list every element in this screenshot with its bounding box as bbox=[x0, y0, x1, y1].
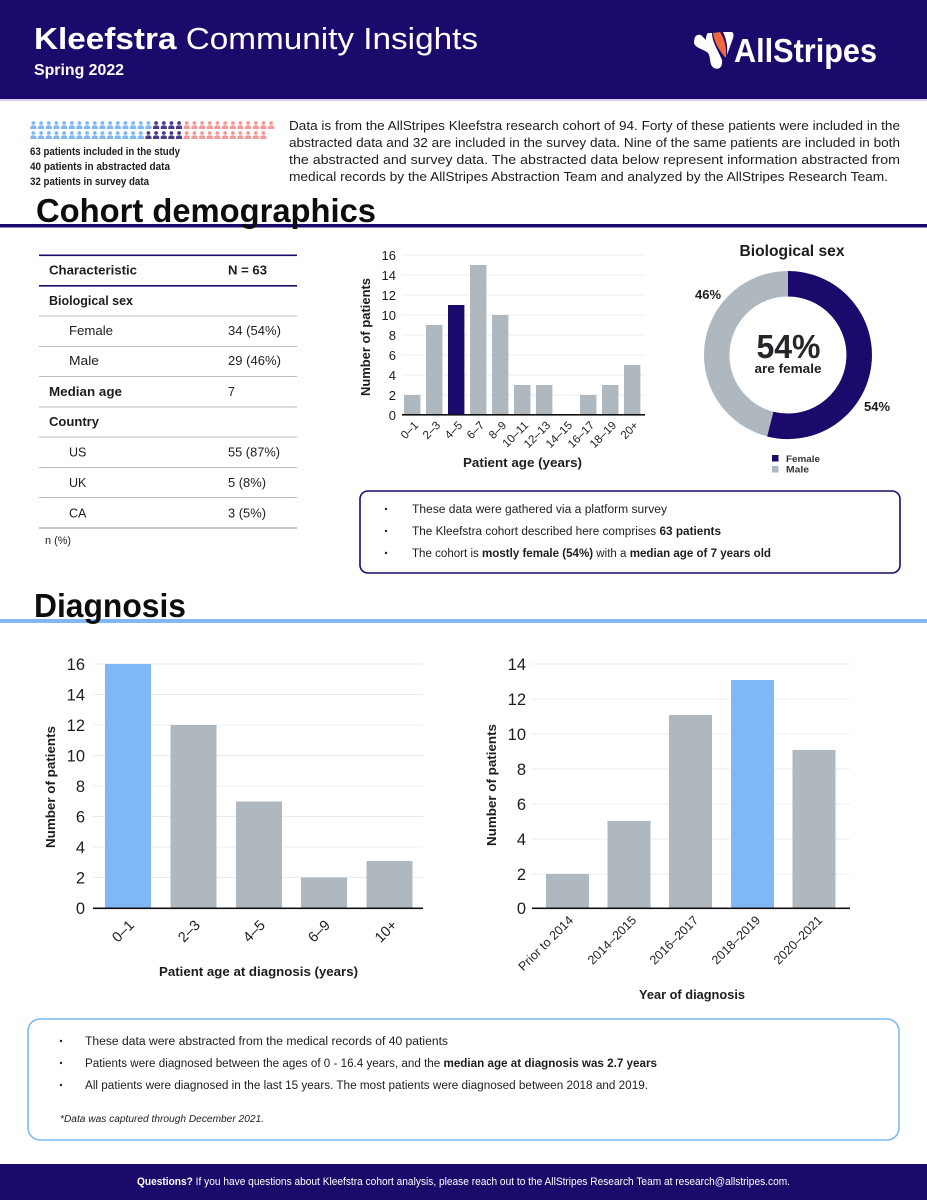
bar chart: year of diagnosis: 12 bbox=[508, 691, 526, 709]
table: cohort characteristics: CA bbox=[69, 506, 87, 520]
title: Kleefstra Community Insights bbox=[34, 21, 478, 56]
table: cohort characteristics: Country bbox=[49, 415, 99, 429]
table: cohort characteristics: Female bbox=[69, 324, 113, 338]
bar chart: year of diagnosis bbox=[485, 656, 850, 1002]
table: cohort characteristics: 34 (54%) bbox=[228, 324, 281, 338]
bar chart: year of diagnosis: 4 bbox=[517, 831, 526, 849]
pictogram legend text: 63 patients included in the study bbox=[30, 146, 181, 158]
bar chart: year of diagnosis: 6 bbox=[517, 796, 526, 814]
bar chart: age at diagnosis: Number of patients bbox=[44, 726, 58, 848]
bar chart: age at diagnosis bbox=[44, 656, 423, 979]
bar chart: age at diagnosis: 4–5 bbox=[240, 918, 269, 946]
callout: demographics summary: The cohort is mostly female (54%) with a median age of 7 years old bbox=[412, 548, 771, 560]
intro paragraph bbox=[289, 119, 900, 184]
section heading: diagnosis bbox=[0, 587, 927, 624]
bar chart: age at diagnosis: 2–3 bbox=[175, 918, 204, 946]
pictogram: patient icons bbox=[30, 121, 274, 139]
bar chart: patient age: 0 bbox=[389, 408, 396, 423]
bar chart: age at diagnosis: 6–9 bbox=[305, 918, 334, 946]
callout: diagnosis summary bbox=[28, 1019, 899, 1140]
bar chart: age at diagnosis: 8 bbox=[76, 778, 85, 796]
callout: demographics summary: These data were gathered via a platform survey bbox=[412, 504, 667, 516]
table: cohort characteristics: 3 (5%) bbox=[228, 506, 266, 520]
bar chart: year of diagnosis: 2014–2015 bbox=[585, 913, 639, 967]
bar chart: year of diagnosis: 2016–2017 bbox=[647, 913, 701, 967]
legend: Male bbox=[786, 464, 809, 476]
section heading: cohort demographics bbox=[0, 192, 927, 229]
bar chart: patient age: 12–13 bbox=[522, 420, 553, 451]
callout: diagnosis summary: Patients were diagnosed between the ages of 0 - 16.4 years, and the median age at diagnosis was 2.7 years bbox=[85, 1058, 657, 1070]
table: cohort characteristics: N = 63 bbox=[228, 264, 267, 278]
bar chart: patient age: 18–19 bbox=[588, 420, 619, 451]
section heading: diagnosis: Diagnosis bbox=[34, 587, 186, 624]
bar chart: patient age bbox=[359, 248, 645, 470]
callout: demographics summary: The Kleefstra cohort described here comprises 63 patients bbox=[412, 526, 721, 538]
bar chart: patient age: 16–17 bbox=[566, 420, 597, 451]
callout: demographics summary bbox=[360, 491, 900, 573]
pictogram legend text: 40 patients in abstracted data bbox=[30, 161, 171, 173]
intro paragraph: medical records by the AllStripes Abstraction Team and analyzed by the AllStripes Research Team. bbox=[289, 170, 888, 184]
bar chart: patient age: 6–7 bbox=[465, 420, 487, 442]
legend: Female bbox=[786, 454, 820, 465]
bar chart: patient age: 20+ bbox=[619, 419, 641, 442]
bar chart: patient age: 6 bbox=[389, 348, 396, 363]
bar chart: year of diagnosis: 2 bbox=[517, 866, 526, 884]
table: cohort characteristics: 29 (46%) bbox=[228, 354, 281, 368]
header banner bbox=[0, 0, 927, 101]
bar chart: patient age: 4–5 bbox=[443, 420, 465, 442]
subtitle: Spring 2022 bbox=[34, 62, 124, 79]
table: cohort characteristics: Median age bbox=[49, 385, 122, 399]
callout: diagnosis summary: All patients were diagnosed in the last 15 years. The most patients were diagnosed between 2018 and 2019. bbox=[85, 1080, 648, 1092]
bar chart: year of diagnosis: 2020–2021 bbox=[771, 913, 825, 967]
bar chart: year of diagnosis: Prior to 2014 bbox=[516, 913, 576, 974]
footer bbox=[0, 1164, 927, 1200]
table: cohort characteristics: 55 (87%) bbox=[228, 446, 280, 460]
bar chart: patient age: 10–11 bbox=[501, 420, 531, 450]
intro paragraph: the abstracted and survey data. The abstracted data below represent information abstracted from bbox=[289, 153, 900, 167]
bar chart: age at diagnosis: 14 bbox=[67, 686, 85, 704]
table: cohort characteristics: 5 (8%) bbox=[228, 476, 266, 490]
bar chart: age at diagnosis: 10 bbox=[67, 748, 85, 766]
table: cohort characteristics bbox=[39, 254, 297, 547]
bar chart: year of diagnosis: 14 bbox=[508, 656, 526, 674]
bar chart: age at diagnosis: 0–1 bbox=[109, 918, 138, 946]
bar chart: year of diagnosis: Number of patients bbox=[485, 724, 499, 846]
table: cohort characteristics: Male bbox=[69, 354, 99, 368]
bar chart: age at diagnosis: 0 bbox=[76, 900, 85, 918]
bar chart: year of diagnosis: 8 bbox=[517, 761, 526, 779]
callout: diagnosis summary: These data were abstracted from the medical records of 40 patients bbox=[85, 1036, 448, 1048]
donut chart: biological sex: 46% bbox=[695, 288, 721, 302]
pictogram legend text bbox=[30, 146, 181, 188]
bar chart: age at diagnosis: 2 bbox=[76, 870, 85, 888]
bar chart: age at diagnosis: Patient age at diagnosis (years) bbox=[159, 965, 358, 979]
donut chart: biological sex: 54% bbox=[864, 400, 890, 414]
bar chart: patient age: Patient age (years) bbox=[463, 456, 582, 470]
bar chart: patient age: 14–15 bbox=[544, 420, 575, 451]
chart title: Biological sex bbox=[740, 243, 845, 260]
bar chart: age at diagnosis: 12 bbox=[67, 717, 85, 735]
legend bbox=[772, 454, 820, 476]
bar chart: age at diagnosis: 6 bbox=[76, 808, 85, 826]
bar chart: year of diagnosis: 0 bbox=[517, 900, 526, 918]
bar chart: age at diagnosis: 10+ bbox=[372, 918, 401, 946]
bar chart: year of diagnosis: Year of diagnosis bbox=[639, 988, 745, 1002]
bar chart: patient age: 8–9 bbox=[487, 420, 509, 442]
table: cohort characteristics: Characteristic bbox=[49, 264, 137, 278]
bar chart: age at diagnosis: 16 bbox=[67, 656, 85, 674]
footer: Questions? If you have questions about Kleefstra cohort analysis, please reach out to the AllStripes Research Team at research@allstripes.com. bbox=[137, 1176, 790, 1188]
pictogram legend text: 32 patients in survey data bbox=[30, 176, 150, 188]
bar chart: patient age: 2 bbox=[389, 388, 396, 403]
table: cohort characteristics: UK bbox=[69, 476, 87, 490]
bar chart: patient age: 0–1 bbox=[399, 420, 421, 442]
bar chart: patient age: 12 bbox=[382, 288, 396, 303]
bar chart: patient age: 10 bbox=[382, 308, 396, 323]
bar chart: patient age: 4 bbox=[389, 368, 396, 383]
intro paragraph: abstracted data and 32 are included in the survey data. Nine of the same patients are included in both bbox=[289, 136, 900, 150]
table: cohort characteristics: 7 bbox=[228, 385, 235, 399]
donut chart: biological sex: 54% bbox=[756, 328, 820, 365]
section heading: cohort demographics: Cohort demographics bbox=[36, 192, 376, 229]
bar chart: patient age: 2–3 bbox=[421, 420, 443, 442]
bar chart: patient age: 8 bbox=[389, 328, 396, 343]
bar chart: age at diagnosis: 4 bbox=[76, 839, 85, 857]
intro paragraph: Data is from the AllStripes Kleefstra research cohort of 94. Forty of these patients were included in the bbox=[289, 119, 900, 133]
bar chart: patient age: Number of patients bbox=[359, 278, 373, 396]
bar chart: patient age: 14 bbox=[382, 268, 396, 283]
bar chart: year of diagnosis: 2018–2019 bbox=[709, 913, 763, 967]
table: cohort characteristics: US bbox=[69, 446, 86, 460]
table: cohort characteristics: Biological sex bbox=[49, 294, 133, 308]
bar chart: patient age: 16 bbox=[382, 248, 396, 263]
donut chart: biological sex: are female bbox=[754, 361, 822, 376]
footnote: *Data was captured through December 2021. bbox=[60, 1114, 264, 1125]
logo: AllStripes: AllStripes bbox=[734, 32, 877, 69]
donut chart: biological sex bbox=[695, 243, 890, 476]
bar chart: year of diagnosis: 10 bbox=[508, 726, 526, 744]
table footnote: n (%) bbox=[45, 535, 71, 547]
